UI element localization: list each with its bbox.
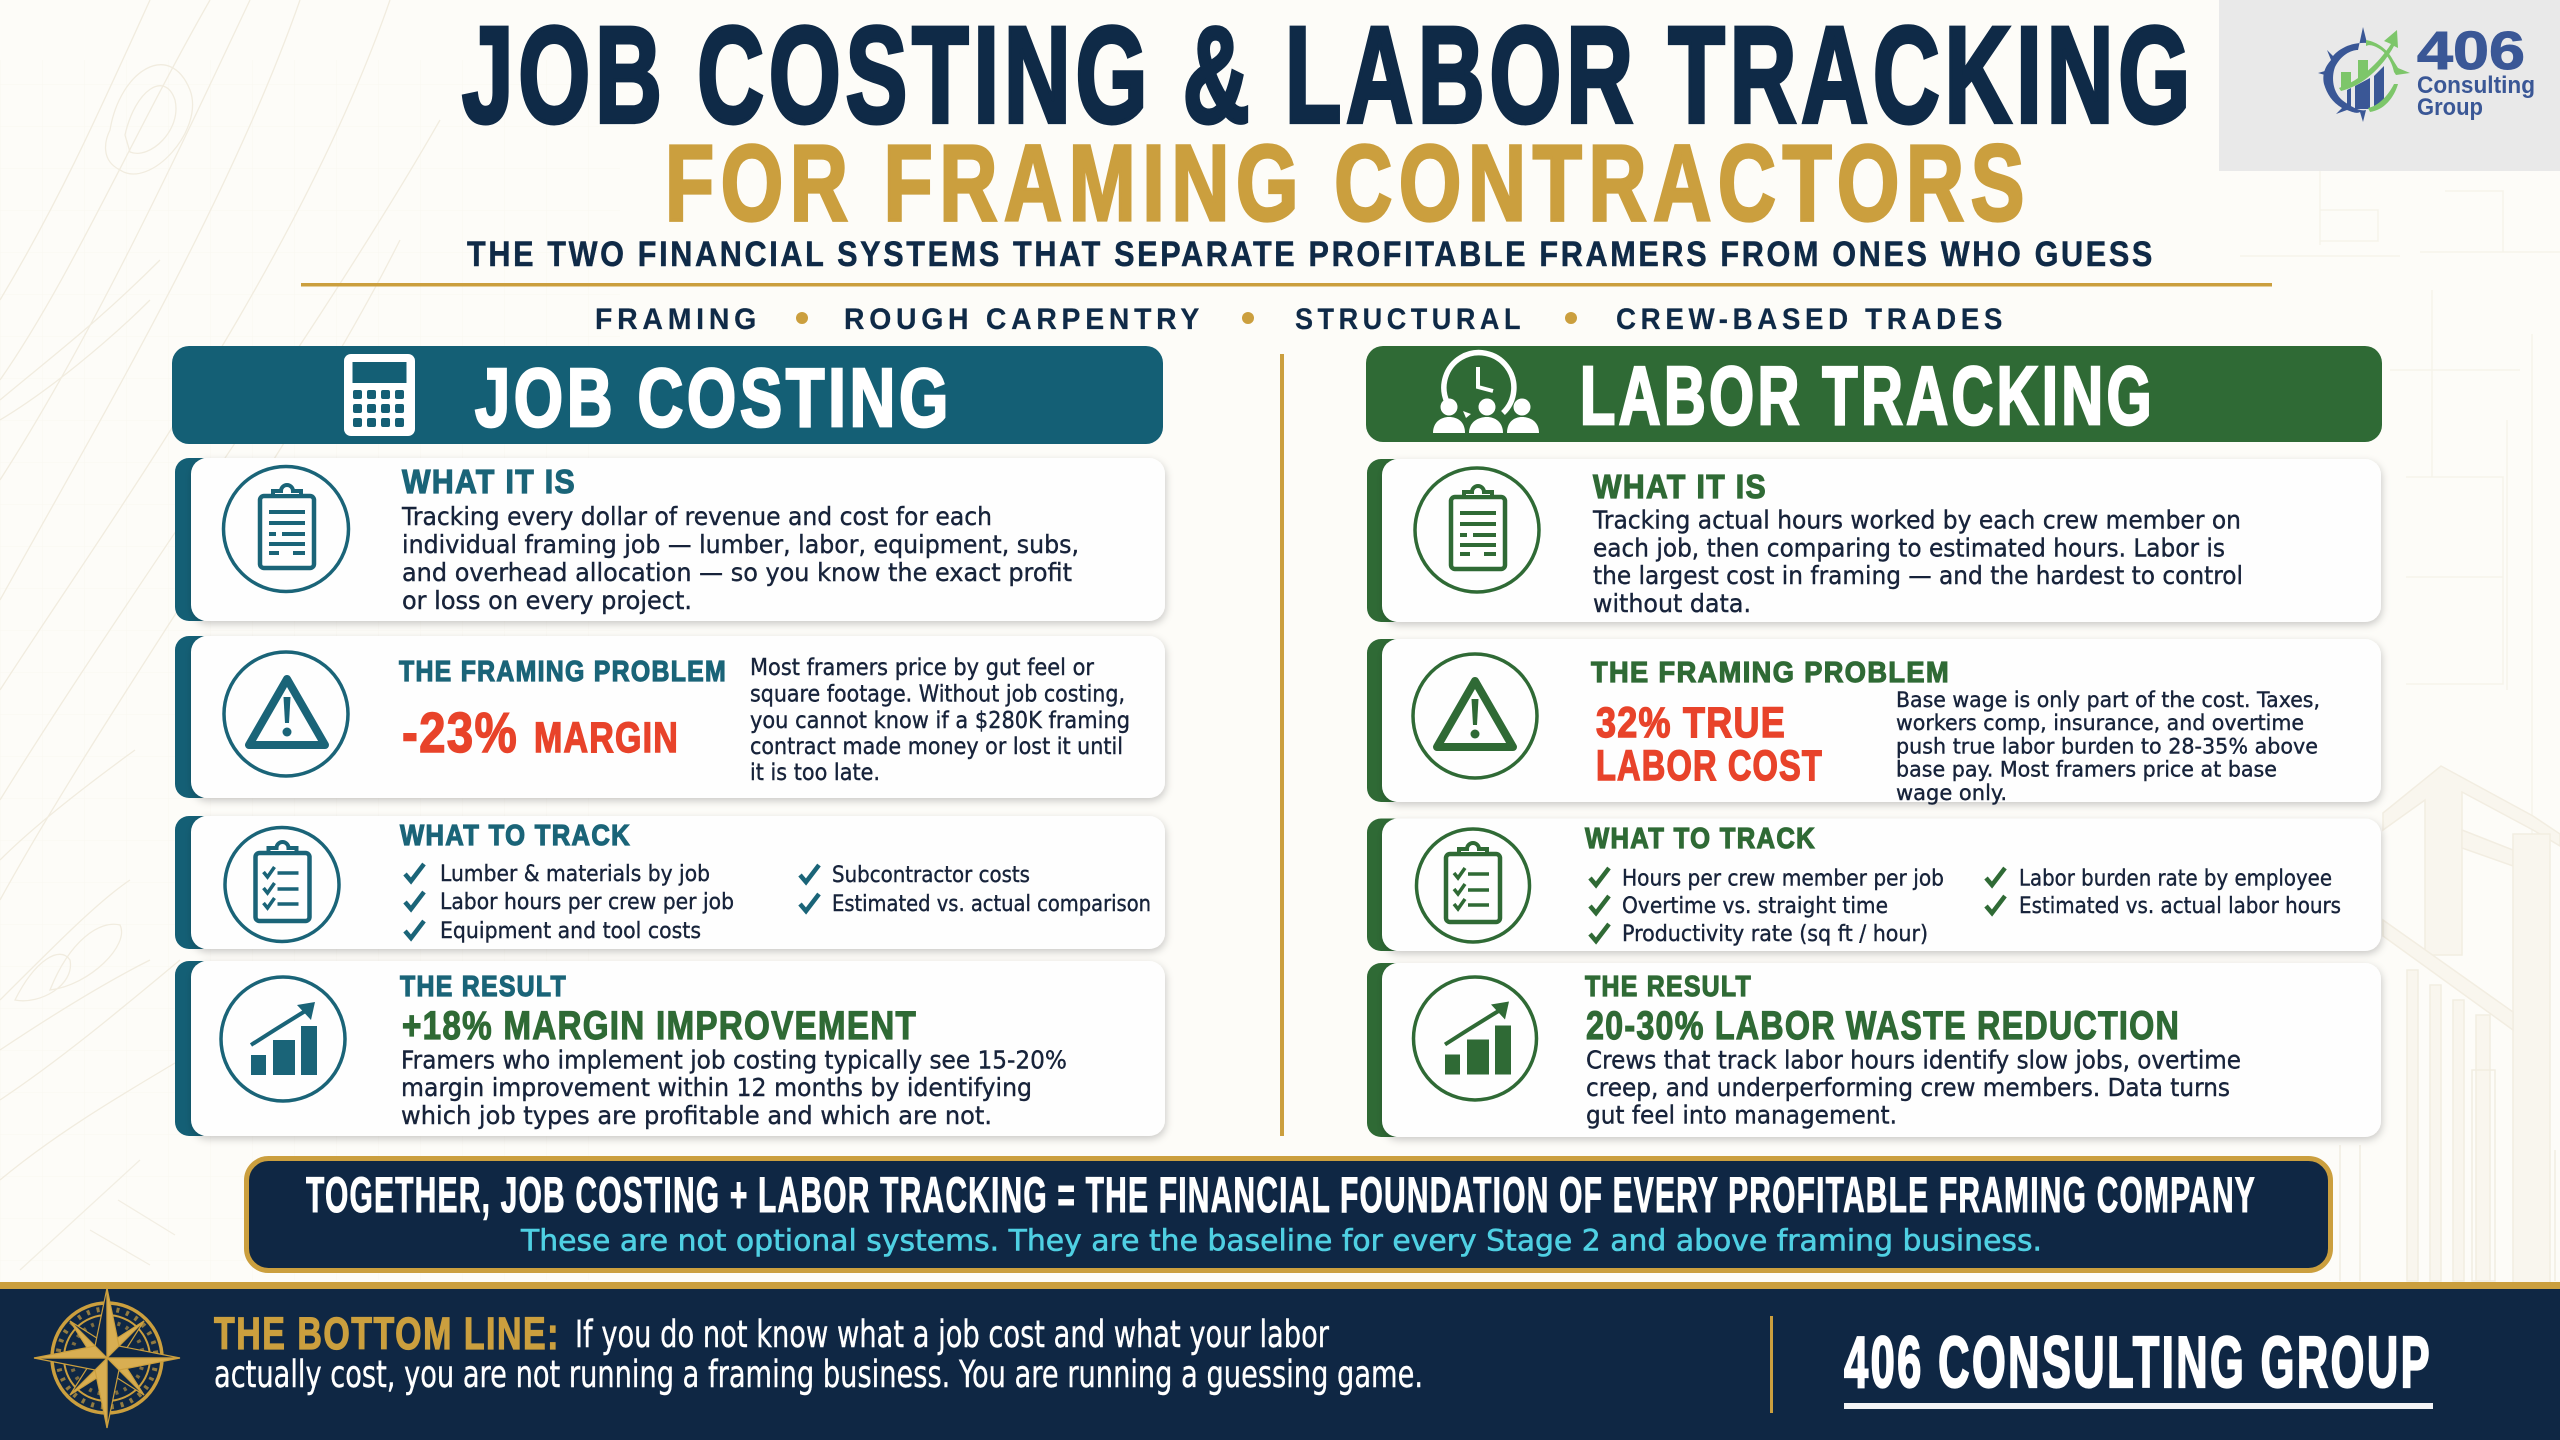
- icon: growth chart: [1414, 977, 1536, 1100]
- panel: job costing what it is: individual framing job — lumber, labor, equipment, subs,: [402, 530, 1079, 559]
- panel: job costing what it is: Tracking every dollar of revenue and cost for each: [401, 502, 992, 531]
- panel: job costing framing problem: THE FRAMING PROBLEM: [399, 656, 727, 688]
- logo: 406: [2417, 21, 2525, 81]
- panel: labor tracking result: gut feel into management.: [1586, 1100, 1897, 1130]
- checklist left: [1590, 866, 1944, 947]
- header: job costing: JOB COSTING: [475, 351, 952, 444]
- panel: labor tracking what it is: each job, then comparing to estimated hours. Labor is: [1593, 534, 2225, 562]
- panel: labor tracking framing problem: LABOR COST: [1596, 742, 1823, 790]
- header: job costing: [172, 346, 1163, 444]
- logo: Consulting: [2417, 72, 2535, 99]
- checklist left: [405, 862, 734, 944]
- panel: job costing framing problem: [175, 636, 1165, 798]
- panel: labor tracking what it is: the largest cost in framing — and the hardest to control: [1593, 561, 2243, 590]
- panel: labor tracking framing problem: 32% TRUE: [1596, 699, 1786, 747]
- icon: clipboard: [224, 466, 348, 592]
- panel: labor tracking what it is: [1367, 459, 2381, 622]
- checklist left: Labor hours per crew per job: [440, 890, 734, 915]
- panel: labor tracking framing problem: THE FRAMING PROBLEM: [1591, 657, 1950, 689]
- panel: labor tracking result: [1367, 963, 2381, 1137]
- panel: job costing framing problem: contract made money or lost it until: [750, 734, 1123, 760]
- checklist left: Productivity rate (sq ft / hour): [1622, 922, 1928, 947]
- icon: checklist: [1416, 829, 1530, 942]
- footer band: THE BOTTOM LINE:: [214, 1308, 560, 1359]
- trade tags: CREW-BASED TRADES: [1616, 303, 2007, 336]
- logo mark: [2318, 27, 2410, 122]
- panel: labor tracking what it is: without data.: [1593, 589, 1751, 618]
- panel: labor tracking framing problem: base pay. Most framers price at base: [1896, 758, 2277, 782]
- panel: job costing result: +18% MARGIN IMPROVEMENT: [402, 1004, 917, 1048]
- panel: job costing framing problem: square footage. Without job costing,: [750, 682, 1125, 708]
- panel: labor tracking framing problem: workers comp, insurance, and overtime: [1896, 711, 2304, 735]
- logo: Group: [2417, 94, 2483, 121]
- checklist left: Hours per crew member per job: [1622, 866, 1944, 892]
- icon: clipboard: [1415, 468, 1539, 592]
- panel: job costing framing problem: Most framers price by gut feel or: [750, 655, 1094, 681]
- panel: labor tracking framing problem: push true labor burden to 28-35% above: [1896, 734, 2318, 758]
- panel: job costing framing problem: -23%: [402, 701, 518, 765]
- checklist right: Estimated vs. actual labor hours: [2019, 894, 2341, 919]
- panel: job costing result: margin improvement within 12 months by identifying: [401, 1073, 1032, 1102]
- icon: warning: [224, 652, 348, 776]
- panel: job costing what it is: WHAT IT IS: [402, 463, 576, 500]
- trade tags: [595, 303, 2007, 336]
- panel: labor tracking framing problem: wage only.: [1896, 781, 2007, 805]
- checklist right: Labor burden rate by employee: [2019, 866, 2332, 892]
- checklist right: Estimated vs. actual comparison: [832, 892, 1151, 917]
- panel: job costing what it is: or loss on every project.: [402, 586, 692, 615]
- panel: job costing framing problem: you cannot know if a $280K framing: [750, 708, 1130, 734]
- panel: labor tracking what to track: [1367, 818, 2381, 951]
- checklist left: Overtime vs. straight time: [1622, 894, 1888, 919]
- icon: clock and crew: [1433, 353, 1539, 433]
- icon: calculator: [344, 354, 415, 436]
- panel: labor tracking result: creep, and underperforming crew members. Data turns: [1586, 1073, 2230, 1102]
- panel: job costing what it is: [175, 458, 1165, 621]
- panel: labor tracking result: THE RESULT: [1585, 971, 1752, 1003]
- panel: job costing result: THE RESULT: [400, 971, 567, 1003]
- checklist right: [800, 863, 1151, 917]
- header: labor tracking: LABOR TRACKING: [1580, 349, 2155, 442]
- panel: job costing what to track: [175, 816, 1165, 949]
- footer band: actually cost, you are not running a framing business. You are running a guessing game.: [214, 1353, 1423, 1396]
- icon: warning: [1413, 654, 1537, 778]
- trade tags: ROUGH CARPENTRY: [844, 303, 1204, 336]
- faint building frame: [2340, 766, 2560, 1284]
- checklist left: Lumber & materials by job: [440, 862, 710, 887]
- panel: job costing framing problem: MARGIN: [534, 714, 679, 762]
- panel: job costing what to track: WHAT TO TRACK: [400, 820, 631, 852]
- panel: job costing result: [175, 961, 1165, 1136]
- checklist left: Equipment and tool costs: [440, 919, 701, 944]
- panel: labor tracking framing problem: [1367, 639, 2381, 805]
- panel: labor tracking result: 20-30% LABOR WASTE REDUCTION: [1586, 1004, 2180, 1048]
- footer band: If you do not know what a job cost and what your labor: [575, 1313, 1330, 1356]
- panel: job costing what it is: and overhead allocation — so you know the exact profit: [402, 558, 1072, 587]
- panel: labor tracking what it is: WHAT IT IS: [1593, 468, 1767, 505]
- checklist right: Subcontractor costs: [832, 863, 1030, 888]
- icon: growth chart: [221, 977, 345, 1101]
- callout: together: [246, 1158, 2330, 1270]
- panel: labor tracking what to track: WHAT TO TRACK: [1585, 823, 1816, 855]
- panel: labor tracking framing problem: Base wage is only part of the cost. Taxes,: [1896, 688, 2320, 712]
- icon: compass rose: [34, 1288, 180, 1428]
- logo: [2219, 0, 2560, 171]
- panel: job costing framing problem: it is too late.: [750, 760, 880, 786]
- panel: labor tracking what it is: Tracking actual hours worked by each crew member on: [1592, 506, 2241, 534]
- trade tags: STRUCTURAL: [1295, 303, 1525, 336]
- icon: checklist: [225, 828, 339, 942]
- panel: job costing result: which job types are profitable and which are not.: [401, 1101, 992, 1130]
- checklist right: [1986, 866, 2341, 919]
- subtitle: FOR FRAMING CONTRACTORS: [665, 122, 2031, 243]
- panel: labor tracking result: Crews that track labor hours identify slow jobs, overtime: [1586, 1046, 2241, 1074]
- tagline: THE TWO FINANCIAL SYSTEMS THAT SEPARATE PROFITABLE FRAMERS FROM ONES WHO GUESS: [467, 235, 2155, 274]
- callout: together: These are not optional systems. They are the baseline for every Stage 2 and above framing business.: [520, 1224, 2042, 1258]
- footer band: [0, 1282, 2560, 1440]
- panel: job costing result: Framers who implement job costing typically see 15-20%: [401, 1046, 1067, 1074]
- trade tags: FRAMING: [595, 303, 761, 336]
